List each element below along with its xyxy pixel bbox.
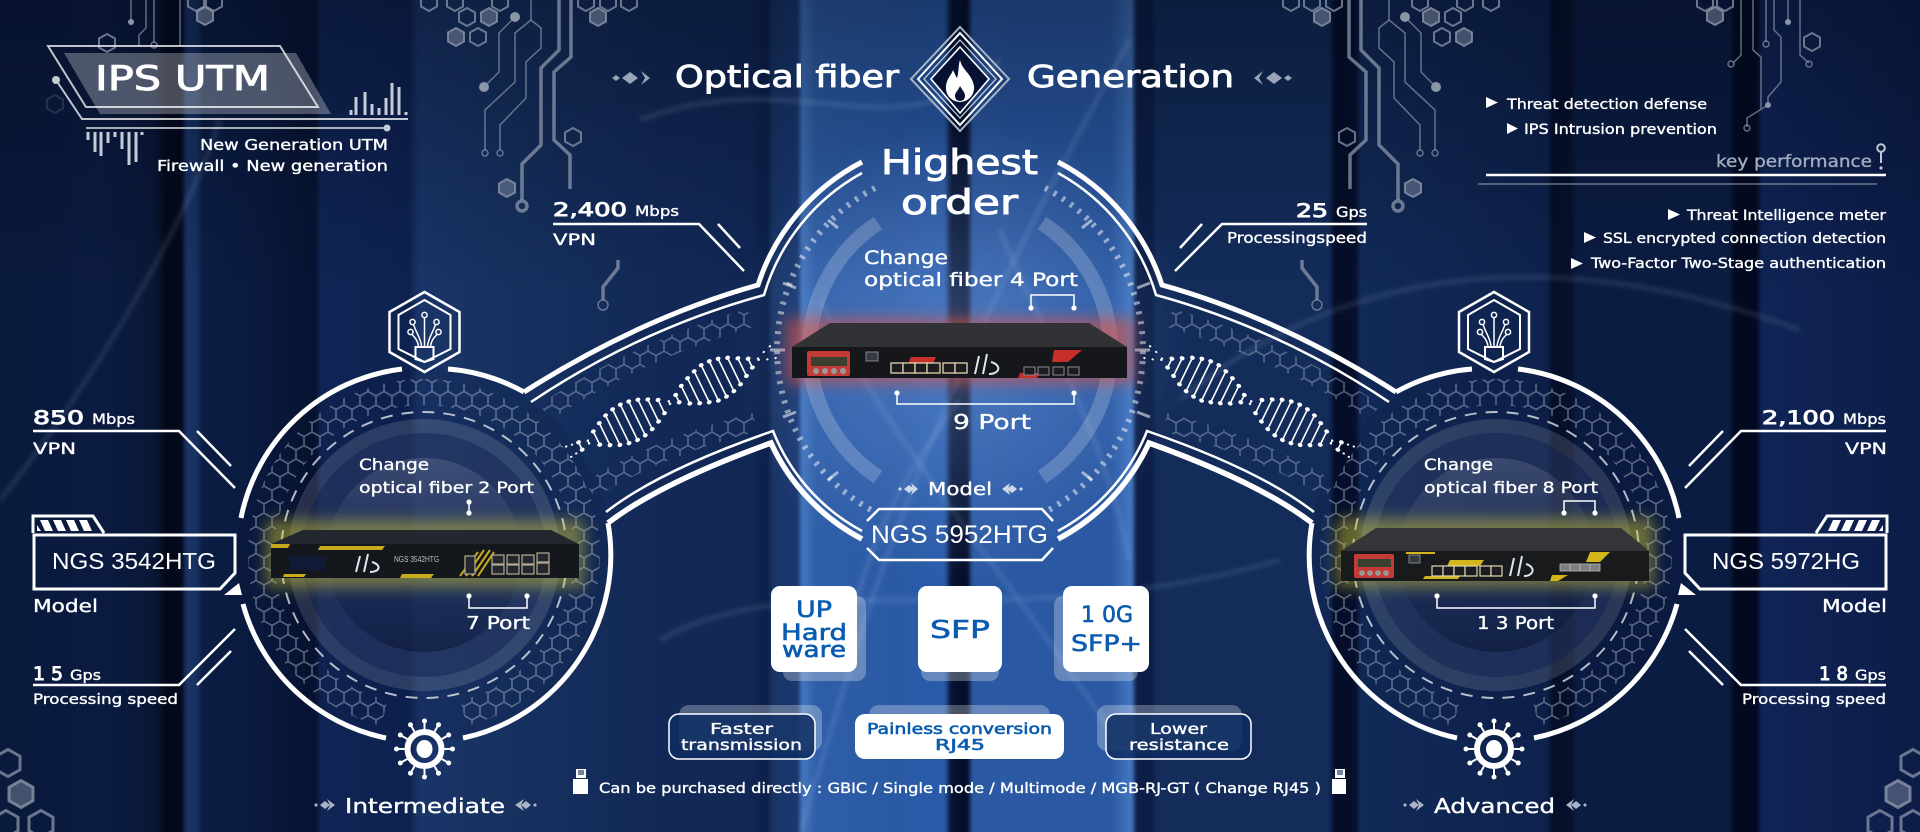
icon: DNA right <box>1139 334 1360 469</box>
icon: virus right <box>1466 721 1522 777</box>
port labels left: 7 Port <box>466 613 530 634</box>
subtitle: Firewall • New generation <box>157 157 388 175</box>
stat: 15 Gps Processing speed <box>33 629 235 708</box>
stat: 15 Gps Processing speed: 1 5 <box>33 663 63 685</box>
footnote: Can be purchased directly : GBIC / Single mode / Multimode / MGB-RJ-GT ( Change RJ45 ) <box>599 781 1321 797</box>
card: 10G SFP+: 1 0G <box>1081 603 1133 628</box>
button: Lower resistance <box>1097 705 1251 759</box>
stat: 850 Mbps VPN: 850 <box>33 407 84 429</box>
card: SFP <box>918 586 1002 681</box>
centre model label: Model <box>928 479 992 500</box>
centre model label: NGS 5952HTG <box>871 521 1048 549</box>
icon: virus left <box>396 721 453 777</box>
stat: 2,400 Mbps VPN <box>553 199 744 271</box>
button: Lower resistance: Lower <box>1150 720 1208 738</box>
stat: 18 Gps Processing speed <box>1685 629 1886 708</box>
stat: 18 Gps Processing speed: Gps <box>1855 668 1886 684</box>
port labels left: optical fiber 2 Port <box>359 478 534 497</box>
subtitle <box>157 136 388 175</box>
port labels centre: optical fiber 4 Port <box>864 269 1078 291</box>
port labels left <box>359 455 534 634</box>
title: Generation <box>1027 60 1234 95</box>
card: UP Hardware: ware <box>782 638 846 663</box>
card: SFP: SFP <box>930 615 990 644</box>
stat: 25 Gps Processingspeed: Processingspeed <box>1227 229 1367 247</box>
model box left: Model <box>33 596 98 617</box>
stat: 15 Gps Processing speed: Gps <box>70 668 101 684</box>
icon: fibre hexagon right <box>1459 292 1529 372</box>
model box right <box>1678 516 1887 617</box>
stat: 2,400 Mbps VPN: 2,400 <box>553 199 627 221</box>
panel: centre dial <box>770 188 1150 512</box>
stat: 850 Mbps VPN <box>33 407 235 488</box>
card: UP Hardware: Hard <box>781 621 847 646</box>
panel: left circle <box>237 368 611 742</box>
device: NGS 5972HG <box>1336 518 1654 588</box>
label: Advanced <box>1403 794 1587 818</box>
heading: Highest order: Highest <box>881 143 1038 183</box>
panel: right circle <box>1309 368 1683 742</box>
device: NGS 3542HTG <box>266 520 584 588</box>
bridges and centre arcs right <box>1058 162 1396 539</box>
card: UP Hardware <box>771 586 866 681</box>
port labels right: optical fiber 8 Port <box>1424 478 1598 497</box>
icon: fibre hexagon left <box>390 292 460 372</box>
right list: top: IPS Intrusion prevention <box>1524 122 1717 138</box>
circuit traces top left <box>47 0 222 113</box>
port labels right <box>1424 455 1598 634</box>
right list: top: Threat detection defense <box>1506 97 1707 113</box>
title: Optical fiber <box>675 60 900 95</box>
stat: 850 Mbps VPN: VPN <box>33 439 76 458</box>
stat: 18 Gps Processing speed: Processing speed <box>1742 692 1886 708</box>
heading: Highest order: order <box>901 183 1018 223</box>
button: Lower resistance: resistance <box>1129 736 1229 754</box>
heading: Highest order <box>881 143 1038 223</box>
label: Advanced: Advanced <box>1434 794 1555 818</box>
port labels centre: 9 Port <box>953 410 1031 434</box>
stat: 2,100 Mbps VPN: Mbps <box>1843 412 1886 428</box>
port labels right: 1 3 Port <box>1477 613 1554 634</box>
circuit traces left of centre <box>421 0 637 310</box>
circuit traces top right <box>1697 0 1820 131</box>
stat: 850 Mbps VPN: Mbps <box>92 412 135 428</box>
bridges and centre arcs left <box>524 162 862 539</box>
device: NGS 3542HTG: NGS 3542HTG <box>394 555 439 564</box>
port labels left: Change <box>359 455 429 474</box>
card: 10G SFP+: SFP+ <box>1071 632 1142 657</box>
right list: bottom: Two-Factor Two-Stage authentication <box>1590 256 1886 272</box>
model box right: Model <box>1822 596 1887 617</box>
label: Intermediate: Intermediate <box>345 794 505 818</box>
button: Painless conversion RJ45: RJ45 <box>935 736 985 754</box>
right list: bottom: SSL encrypted connection detection <box>1603 231 1886 247</box>
model box left <box>33 516 242 617</box>
card: UP Hardware: UP <box>796 598 832 623</box>
stat: 25 Gps Processingspeed: 25 <box>1296 200 1328 222</box>
right list: bottom <box>1571 208 1886 272</box>
button: Faster transmission <box>669 705 822 759</box>
subtitle: New Generation UTM <box>200 136 388 154</box>
button: Painless conversion RJ45: Painless conversion <box>867 720 1052 738</box>
device: NGS 5952HTG <box>786 318 1134 384</box>
centre model label <box>867 479 1053 560</box>
button: Painless conversion RJ45 <box>855 705 1064 759</box>
IPS UTM badge <box>48 46 408 165</box>
stat: 18 Gps Processing speed: 1 8 <box>1819 663 1848 685</box>
button: Faster transmission: transmission <box>681 736 802 754</box>
stat: 2,100 Mbps VPN: VPN <box>1845 439 1887 458</box>
circuit traces right of centre <box>1283 0 1499 310</box>
right list: top <box>1486 97 1717 138</box>
port labels right: Change <box>1424 455 1493 474</box>
label: Intermediate <box>314 794 537 818</box>
icon: DNA left <box>560 334 781 469</box>
stat: 2,100 Mbps VPN <box>1685 407 1887 488</box>
footnote <box>573 769 1346 797</box>
IPS UTM badge: IPS UTM <box>95 59 270 99</box>
key performance: key performance <box>1716 152 1872 172</box>
stat: 2,400 Mbps VPN: VPN <box>553 230 596 249</box>
card: 10G SFP+ <box>1054 586 1149 681</box>
icon: flame diamond <box>911 27 1009 131</box>
model box right: NGS 5972HG <box>1712 548 1860 574</box>
stat: 25 Gps Processingspeed: Gps <box>1336 205 1367 221</box>
key performance <box>1478 144 1886 184</box>
stat: 15 Gps Processing speed: Processing speed <box>33 692 178 708</box>
hexagons bottom corners <box>0 750 1920 832</box>
port labels centre: Change <box>864 247 948 269</box>
port labels centre <box>864 247 1078 434</box>
button: Faster transmission: Faster <box>710 720 774 738</box>
stat: 2,100 Mbps VPN: 2,100 <box>1762 407 1835 429</box>
stat: 2,400 Mbps VPN: Mbps <box>635 204 679 220</box>
stat: 25 Gps Processingspeed <box>1175 200 1367 271</box>
title <box>612 60 1292 95</box>
model box left: NGS 3542HTG <box>52 548 216 574</box>
right list: bottom: Threat Intelligence meter <box>1686 208 1886 224</box>
